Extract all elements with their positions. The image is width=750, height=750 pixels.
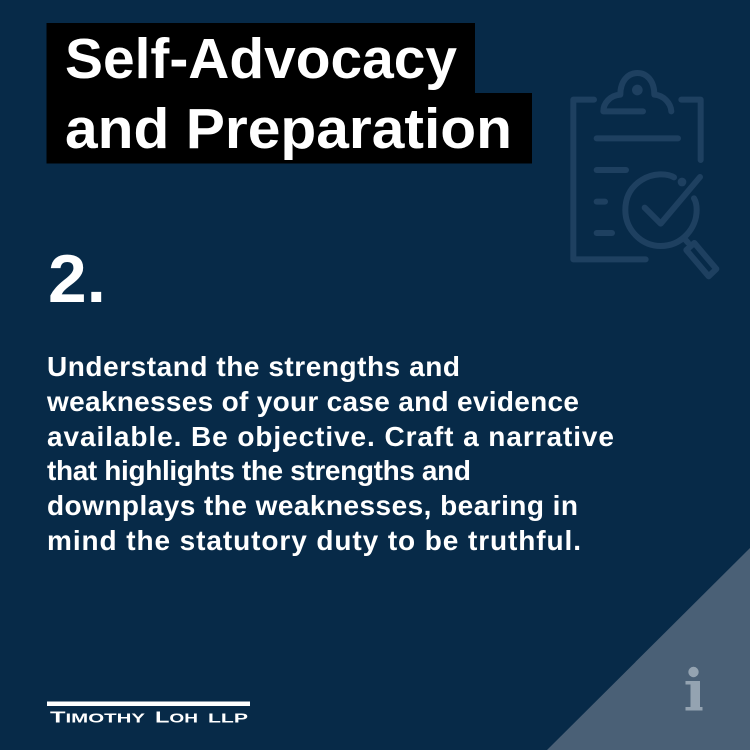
body text: downplays the weaknesses, bearing in	[47, 490, 578, 521]
logo: Timothy Loh LLP	[47, 702, 250, 727]
logo: Timothy Loh LLP: L OH	[155, 710, 198, 727]
body text: that highlights the strengths and	[47, 455, 471, 486]
title line 2: and Preparation	[65, 97, 512, 161]
body text: available. Be objective. Craft a narrative	[47, 421, 614, 452]
title	[46, 23, 532, 164]
icon: clipboard with magnifying glass and check mark	[573, 73, 716, 276]
body text: mind the statutory duty to be truthful.	[47, 525, 581, 556]
title background: second line	[46, 93, 532, 164]
title background: first line	[46, 23, 475, 94]
body text	[46, 351, 614, 556]
body text: weaknesses of your case and evidence	[46, 386, 579, 417]
body text: Understand the strengths and	[47, 351, 460, 382]
step number: 2.	[48, 241, 106, 317]
title line 1: Self-Advocacy	[65, 27, 457, 91]
icon: information letter i	[686, 667, 702, 710]
corner triangle panel	[547, 548, 750, 750]
logo: Timothy Loh LLP: LLP	[208, 712, 248, 726]
logo: Timothy Loh LLP: T IMOTHY	[50, 710, 146, 727]
